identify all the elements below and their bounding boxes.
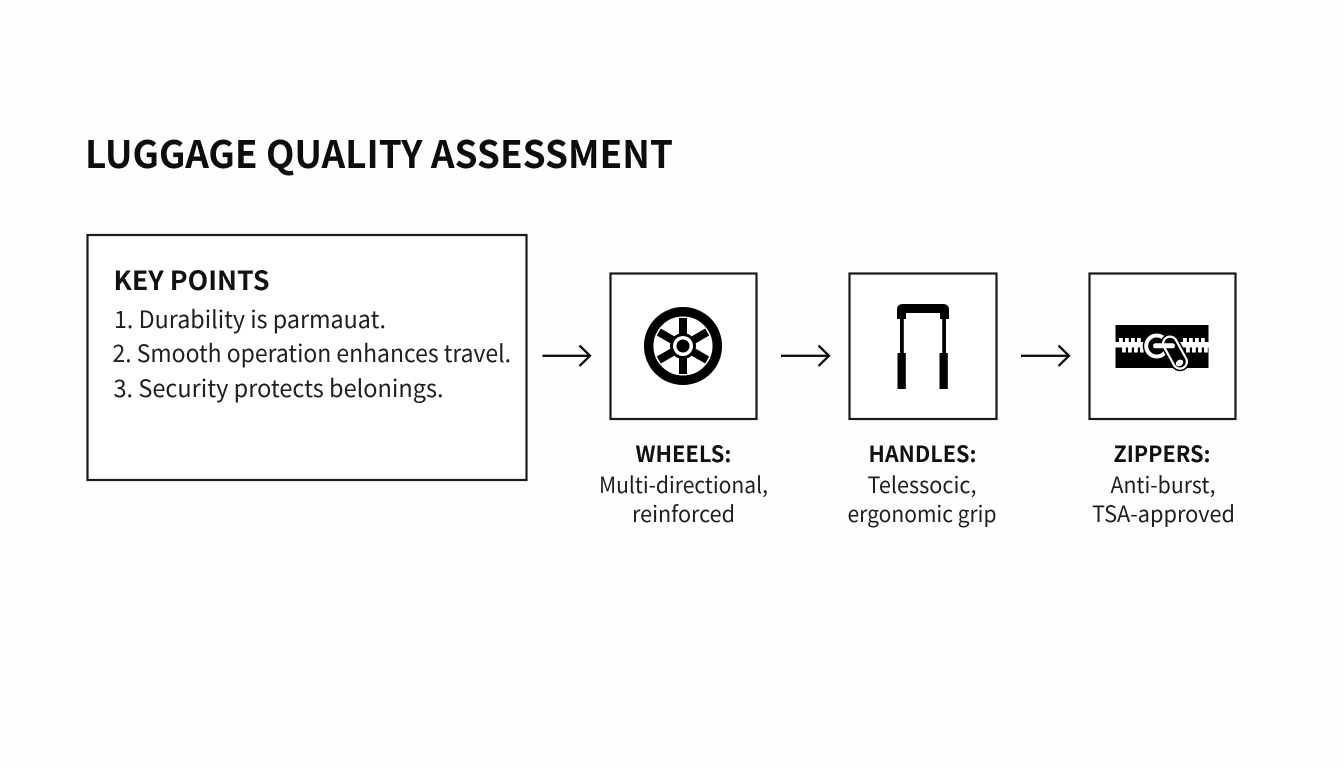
- panel: wheels icon box: [610, 274, 756, 419]
- caption: zippers: Anti-burst,: [1110, 468, 1216, 500]
- caption: zippers: ZIPPERS:: [1114, 437, 1210, 469]
- caption: wheels: [599, 437, 768, 529]
- text: point 2: 2. Smooth operation enhances travel.: [112, 334, 511, 369]
- panel: handles icon box: [850, 274, 996, 419]
- caption: wheels: reinforced: [632, 497, 735, 529]
- caption: handles: HANDLES:: [868, 437, 976, 469]
- caption: handles: Telessocic,: [868, 468, 976, 500]
- panel: zippers icon box: [1090, 274, 1236, 419]
- caption: wheels: WHEELS:: [636, 437, 732, 469]
- arrow: key points to wheels: [542, 346, 590, 366]
- title: LUGGAGE QUALITY ASSESSMENT: [85, 124, 673, 179]
- text: point 3: 3. Security protects belonings.: [114, 369, 444, 404]
- text: point 1: 1. Durability is parmauat.: [114, 300, 386, 335]
- caption: handles: [848, 437, 996, 529]
- heading: key points: KEY POINTS: [114, 259, 270, 298]
- icon: wheel: [649, 312, 717, 380]
- caption: zippers: [1092, 437, 1235, 529]
- arrow: handles to zippers: [1021, 346, 1069, 366]
- arrow: wheels to handles: [781, 346, 829, 366]
- caption: wheels: Multi-directional,: [599, 468, 768, 500]
- icon: zipper: [1116, 325, 1208, 368]
- caption: handles: ergonomic grip: [848, 497, 996, 529]
- icon: telescopic handle: [897, 304, 949, 389]
- caption: zippers: TSA-approved: [1092, 497, 1235, 529]
- panel: key points: [88, 235, 526, 480]
